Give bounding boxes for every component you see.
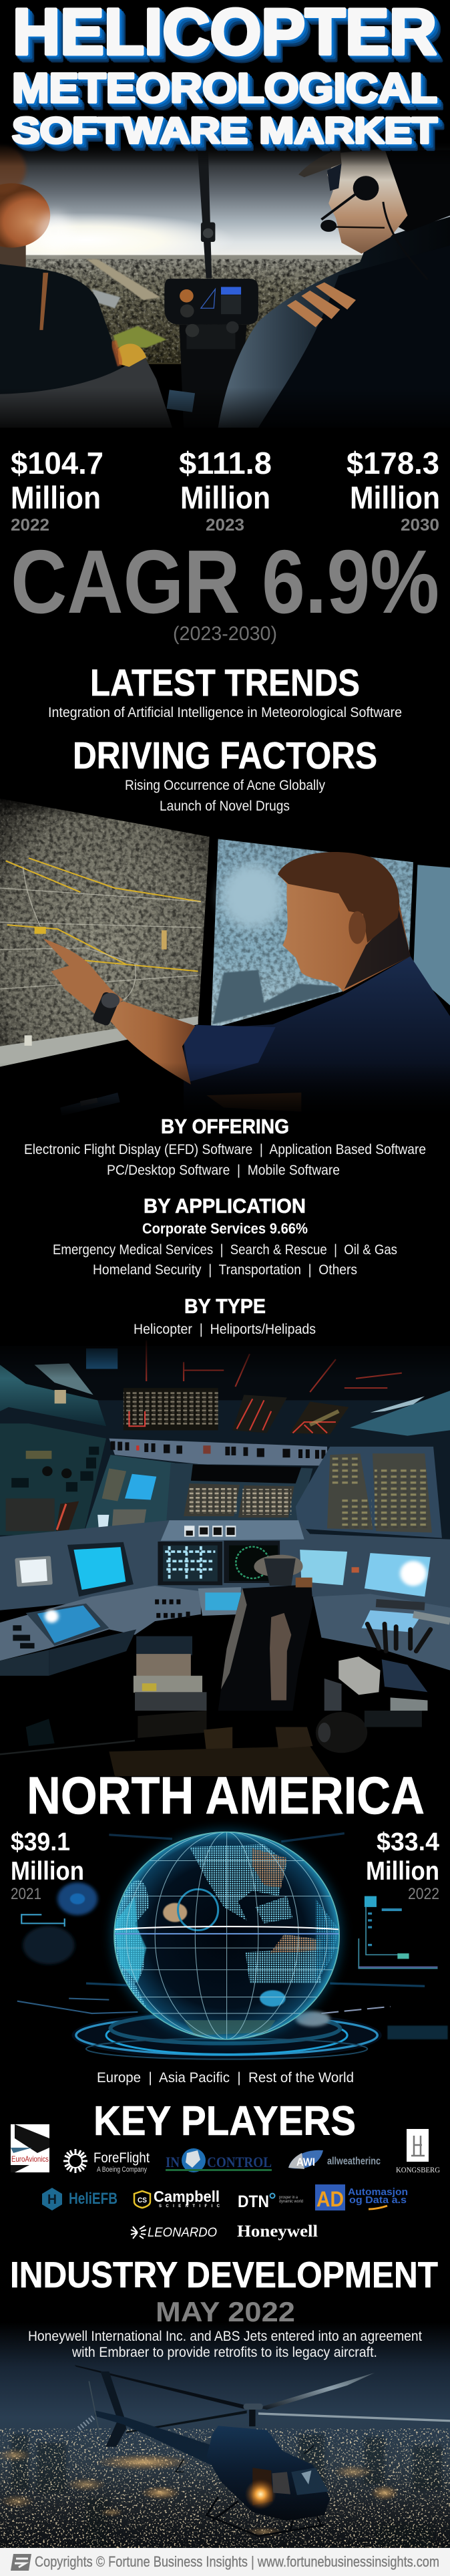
segment: by offering (24, 1115, 426, 1178)
stat: 2030 market size: $178.3 (347, 446, 439, 480)
segment: by type: BY TYPE (184, 1294, 266, 1318)
overhead red panels (124, 1340, 402, 1435)
segment: by offering: BY OFFERING (161, 1115, 289, 1138)
stat: 2030 market size (347, 446, 440, 535)
latest trends (48, 662, 402, 720)
stat: 2022 market size: 2022 (11, 516, 49, 535)
stat: 2023 market size (179, 446, 272, 535)
logo: EuroAvionics (11, 2124, 49, 2172)
man (43, 852, 450, 1128)
segment: by application: Homeland Security | Transportation | Others (93, 1262, 357, 1278)
image: helicopter over night city (0, 2323, 450, 2548)
segment: by application (53, 1194, 397, 1278)
segment: by type: Helicopter | Heliports/Helipads (134, 1322, 316, 1337)
stat: 2023 market size: $111.8 (179, 446, 272, 480)
logo: In Control (166, 2148, 272, 2172)
logo: ForeFlight: A Boeing Company (97, 2166, 147, 2174)
logo: Kongsberg: KONGSBERG (396, 2165, 440, 2174)
stat: 2023 market size: 2023 (206, 516, 244, 535)
latest trends: LATEST TRENDS (90, 662, 360, 704)
logo: ForeFlight: ForeFlight (93, 2150, 150, 2166)
key players heading: KEY PLAYERS (93, 2098, 356, 2144)
stat: 2022 market size: $104.7 (11, 446, 103, 480)
logo: Campbell Scientific (134, 2188, 220, 2208)
logo: allweatherinc: allweatherinc (327, 2156, 381, 2167)
right pilot (218, 148, 450, 428)
logo: allweatherinc: AWI (296, 2156, 315, 2168)
left pilot (0, 144, 172, 428)
logo: Campbell Scientific: Campbell (154, 2188, 220, 2205)
development description: with Embraer to provide retrofits to its legacy aircraft. (71, 2345, 377, 2360)
driving factors (73, 734, 377, 814)
logo: Automasjon og Data: AD (316, 2187, 344, 2211)
image: man pointing at weather map screens (0, 793, 450, 1145)
logo: DTN: DTN (238, 2192, 269, 2211)
logo: Automasjon og Data (315, 2184, 408, 2211)
footer (0, 2548, 450, 2576)
logo: Automasjon og Data: og Data a.s (349, 2194, 407, 2206)
title (12, 0, 437, 151)
image: cockpit with two pilots (0, 142, 450, 436)
helicopter (75, 2365, 450, 2536)
stat: north america 2021 (11, 1828, 84, 1903)
wall panels (0, 1423, 106, 1536)
logo: ForeFlight (63, 2149, 150, 2174)
equipment (136, 1636, 192, 1655)
logo: allweatherinc (288, 2150, 381, 2169)
development description: Honeywell International Inc. and ABS Jets entered into an agreement (28, 2329, 422, 2344)
segment: by application: Emergency Medical Services | Search & Rescue | Oil & Gas (53, 1242, 397, 1258)
platform rings (71, 2011, 382, 2059)
chair (254, 1555, 302, 1577)
logo: DTN (238, 2192, 303, 2211)
logo: DTN: prosper in a (279, 2196, 298, 2200)
segment: by type (134, 1294, 316, 1337)
logo: Campbell Scientific: SCIENTIFIC (159, 2204, 220, 2208)
stat: 2023 market size: Million (180, 480, 270, 515)
segment: by application: Corporate Services 9.66% (142, 1220, 308, 1237)
logo: Leonardo: LEONARDO (148, 2226, 217, 2240)
logo: HeliEFB (42, 2188, 118, 2210)
stat: 2022 market size: Million (11, 480, 101, 515)
logo: HeliEFB: HeliEFB (69, 2190, 118, 2208)
city lights (0, 2428, 450, 2548)
stat: north america 2022: Million (366, 1857, 439, 1886)
CAGR figure: (2023-2030) (173, 623, 277, 645)
driving factors: Launch of Novel Drugs (160, 799, 290, 814)
title: METEOROLOGICAL (12, 65, 437, 112)
development date: MAY 2022 (156, 2296, 295, 2327)
title: SOFTWARE MARKET (12, 110, 437, 151)
image: holographic globe (17, 1830, 448, 2059)
image: dim lower console fade (0, 1711, 422, 1776)
stat: 2022 market size (11, 446, 103, 535)
logo: HeliEFB: H (47, 2192, 57, 2207)
logo: In Control: CONTROL (207, 2154, 272, 2170)
stat: north america 2022 (366, 1828, 439, 1903)
segment: by offering: PC/Desktop Software | Mobile Software (107, 1163, 340, 1178)
logo: Kongsberg (396, 2129, 440, 2174)
lower desk (0, 1586, 201, 1661)
logo: Automasjon og Data: Automasjon (348, 2186, 408, 2198)
stat: north america 2022: $33.4 (377, 1828, 439, 1856)
stat: north america 2021: Million (11, 1857, 84, 1886)
logo: DTN: dynamic world (279, 2200, 303, 2204)
logo: Honeywell: Honeywell (237, 2223, 318, 2241)
footer logo (11, 2554, 31, 2571)
other regions: Europe | Asia Pacific | Rest of the World (97, 2070, 354, 2086)
latest trends: Integration of Artificial Intelligence in Meteorological Software (48, 705, 402, 720)
stat: north america 2021: 2021 (11, 1885, 41, 1903)
development description (28, 2329, 422, 2360)
stat: 2030 market size: Million (350, 480, 440, 515)
logo: EuroAvionics: EuroAvionics (11, 2154, 49, 2164)
driving factors: Rising Occurrence of Acne Globally (125, 778, 325, 793)
stat: north america 2021: $39.1 (11, 1828, 70, 1856)
desk and lower displays (0, 1520, 450, 1624)
logo: Campbell Scientific: CS (138, 2196, 147, 2204)
image: flight deck control console (0, 1338, 450, 1711)
stat: 2030 market size: 2030 (401, 516, 439, 535)
driving factors: DRIVING FACTORS (73, 734, 377, 777)
stat: north america 2022: 2022 (408, 1885, 439, 1903)
side HUD (17, 1834, 448, 2039)
logo: In Control: IN (166, 2154, 180, 2170)
segment: by application: BY APPLICATION (144, 1194, 306, 1218)
